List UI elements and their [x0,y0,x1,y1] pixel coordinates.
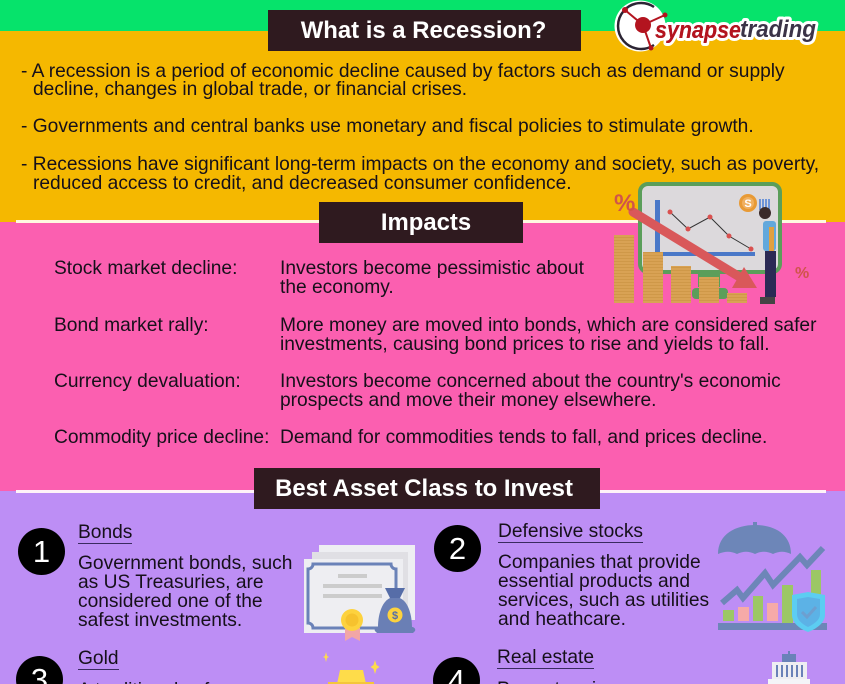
bonds description: Government bonds, such [78,553,292,574]
title: What is a Recession?: What is a Recession? [301,17,546,44]
impact: stock market decline: Investors become pessimistic about [280,258,584,279]
impact: bond market rally [54,315,816,355]
impact: currency devaluation: Currency devaluation: [54,371,241,392]
heading: Best Asset Class to Invest: Best Asset Class to Invest [275,475,573,502]
icon: certificate and money bag: $ [392,610,398,622]
bonds description: considered one of the [78,591,263,612]
green header band [0,0,845,31]
text block: recession definition: reduced access to credit, and decreased consumer confidence. [33,173,572,194]
heading: Impacts: Impacts [381,209,471,236]
asset 3: gold [16,648,220,684]
text block: recession definition: decline, changes in global trade, or financial crises. [33,79,467,100]
panel: what is a recession [0,31,845,222]
defensive stocks description: essential products and [498,571,690,592]
defensive stocks description [498,552,709,630]
asset 1: bonds [18,522,292,631]
impact: bond market rally: More money are moved into bonds, which are considered safer [280,315,816,336]
icon: umbrella over rising chart with shield [718,522,827,632]
text block: recession definition: - Governments and central banks use monetary and fiscal policies to stimulate growth. [21,116,754,137]
icon: certificate and money bag [304,545,416,641]
illustration: falling chart with coins and person: % [614,190,635,217]
bonds description: as US Treasuries, are [78,572,264,593]
number 4 [433,657,480,684]
asset 2: defensive stocks [434,521,709,630]
icon: building [768,651,810,684]
text block: recession definition: - A recession is a period of economic decline caused by factors such as demand or supply [21,61,785,82]
logo: synapsetrading: synapse [655,17,741,44]
number 2: 2 [449,531,466,566]
illustration: falling chart with coins and person [614,182,809,304]
impact: currency devaluation: prospects and move their money elsewhere. [280,390,656,411]
heading: Impacts [319,202,523,243]
bonds description [78,553,292,631]
number 1: 1 [33,534,50,569]
impact: currency devaluation: Investors become concerned about the country's economic [280,371,781,392]
heading: Best Asset Class to Invest [254,468,600,509]
defensive stocks description: Companies that provide [498,552,701,573]
impact: stock market decline: the economy. [280,277,394,298]
panel: best asset class [0,491,845,684]
number 3 [16,656,63,684]
impact: commodity price decline [54,427,767,448]
defensive stocks description: and heathcare. [498,609,626,630]
panel: impacts [0,222,845,491]
impact: stock market decline: Stock market decline: [54,258,237,279]
number 2 [434,525,481,572]
real estate heading: Real estate [497,647,594,668]
illustration: falling chart with coins and person: % [795,265,809,282]
gold heading: Gold [78,648,119,669]
logo: synapsetrading: synapse [655,17,741,44]
number 1 [18,528,65,575]
impact: stock market decline [54,258,584,298]
bonds heading: Bonds [78,522,132,543]
impact: bond market rally: Bond market rally: [54,315,209,336]
defensive stocks description: services, such as utilities [498,590,709,611]
text block: recession definition [21,61,819,194]
impact: commodity price decline: Demand for commodities tends to fall, and prices decline. [280,427,767,448]
icon: gold bar [323,652,380,684]
text block: recession definition: - Recessions have significant long-term impacts on the economy and society, such as poverty, [21,154,819,175]
impact: currency devaluation [54,371,781,411]
bonds description: safest investments. [78,610,242,631]
logo: synapsetrading: trading [740,16,816,43]
illustration: falling chart with coins and person: S [744,198,752,210]
title: What is a Recession? [268,10,581,51]
asset 4: real estate [433,647,668,684]
impact: bond market rally: investments, causing bond prices to rise and yields to fall. [280,334,770,355]
logo: synapsetrading [614,0,818,52]
impact: commodity price decline: Commodity price decline: [54,427,269,448]
defensive stocks heading: Defensive stocks [498,521,643,542]
impacts table [54,258,816,448]
